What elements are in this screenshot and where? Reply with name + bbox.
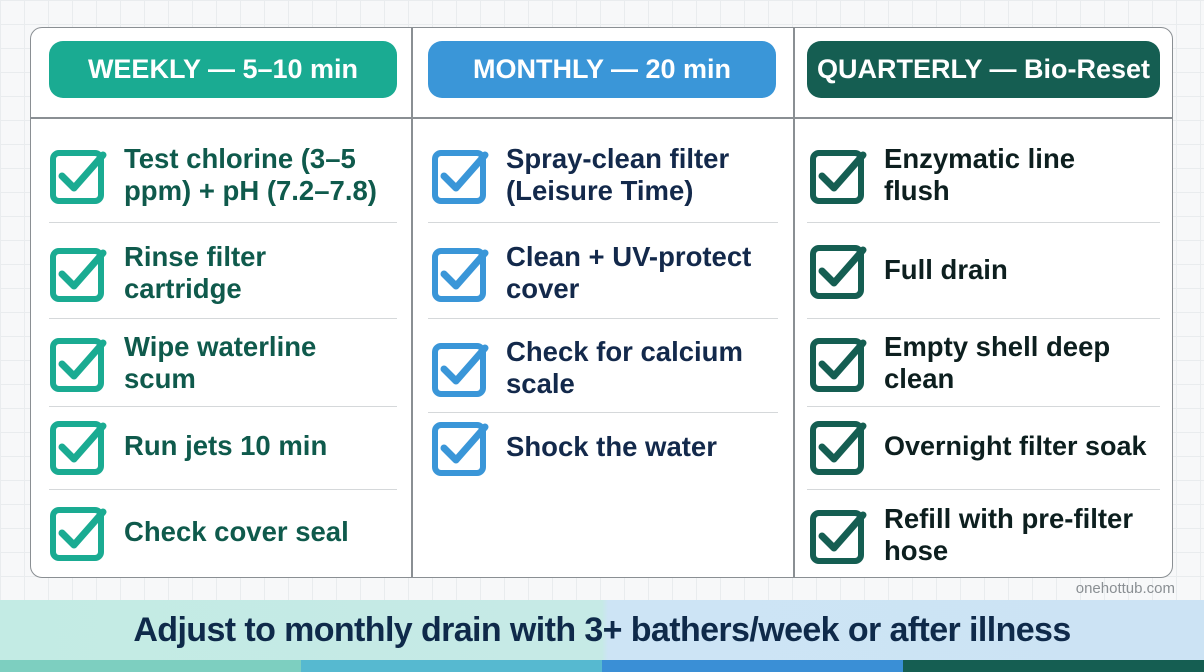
monthly item 4 — [432, 422, 717, 476]
weekly item 3: Wipe waterline — [124, 331, 316, 362]
weekly item 5 — [50, 507, 349, 561]
quarterly item 3: Empty shell deep — [884, 331, 1110, 362]
weekly item 1: Test chlorine (3–5 — [124, 143, 356, 174]
quarterly item 5: Refill with pre-filter — [884, 503, 1133, 534]
monthly item 4: Shock the water — [506, 431, 717, 462]
color stripe — [0, 660, 1204, 672]
weekly item 3: scum — [124, 363, 196, 394]
quarterly item 5 — [810, 503, 1133, 566]
quarterly item 1: flush — [884, 175, 950, 206]
weekly item 5: Check cover seal — [124, 516, 349, 547]
header: weekly: WEEKLY — 5–10 min — [88, 54, 358, 84]
header: quarterly: QUARTERLY — Bio-Reset — [817, 54, 1150, 84]
header: quarterly — [807, 41, 1160, 98]
weekly item 4 — [50, 421, 327, 475]
header: monthly: MONTHLY — 20 min — [473, 54, 731, 84]
source credit: onehottub.com — [1076, 580, 1175, 597]
header: weekly — [49, 41, 397, 98]
footer banner — [0, 600, 1204, 660]
quarterly item 2: Full drain — [884, 254, 1008, 285]
quarterly item 4 — [810, 421, 1147, 475]
monthly item 1 — [432, 143, 729, 206]
monthly item 3 — [432, 336, 743, 399]
quarterly item 1: Enzymatic line — [884, 143, 1075, 174]
monthly item 1: Spray-clean filter — [506, 143, 729, 174]
monthly item 1: (Leisure Time) — [506, 175, 693, 206]
quarterly item 3 — [810, 331, 1110, 394]
weekly item 4: Run jets 10 min — [124, 430, 327, 461]
weekly item 2: cartridge — [124, 273, 242, 304]
card — [30, 27, 1173, 578]
weekly item 1: ppm) + pH (7.2–7.8) — [124, 175, 377, 206]
weekly item 3 — [50, 331, 316, 394]
quarterly item 5: hose — [884, 535, 948, 566]
monthly item 2: Clean + UV-protect — [506, 241, 751, 272]
quarterly item 4: Overnight filter soak — [884, 431, 1147, 461]
quarterly item 1 — [810, 143, 1075, 206]
quarterly item 2 — [810, 245, 1008, 299]
weekly item 2: Rinse filter — [124, 241, 266, 272]
header: monthly — [428, 41, 776, 98]
monthly item 3: Check for calcium — [506, 336, 743, 367]
footer banner: Adjust to monthly drain with 3+ bathers/week or after illness — [133, 610, 1071, 648]
monthly item 2: cover — [506, 273, 579, 304]
monthly item 3: scale — [506, 368, 575, 399]
quarterly item 3: clean — [884, 363, 954, 394]
weekly item 2 — [50, 241, 266, 304]
weekly item 1 — [50, 143, 377, 206]
monthly item 2 — [432, 241, 751, 304]
